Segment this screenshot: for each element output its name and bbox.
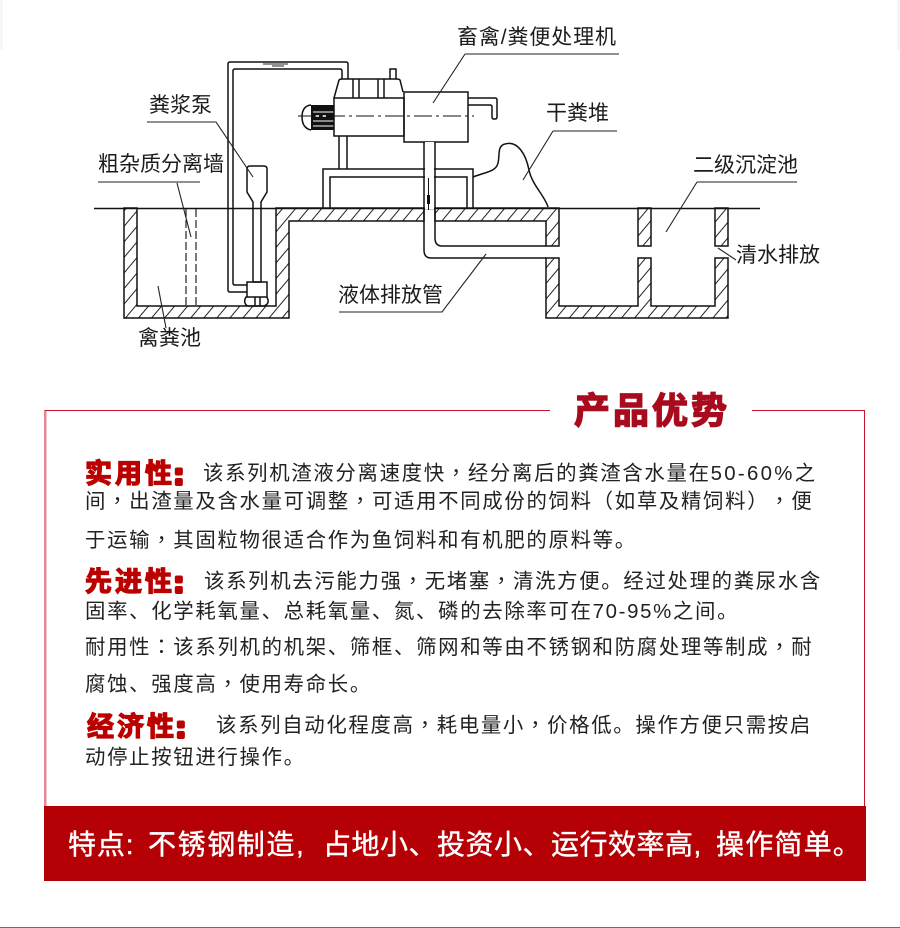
panel: product advantages: [45, 390, 864, 806]
valve: [428, 178, 430, 210]
label: separation wall: 粗杂质分离墙: [98, 153, 224, 176]
label: clean water discharge: 清水排放: [736, 244, 820, 267]
flow arrow on pipe: [263, 64, 288, 66]
top vent: [390, 69, 396, 79]
label: manure pit: [138, 286, 201, 350]
block: practicality: :: [174, 459, 187, 491]
label: slurry pump: 粪浆泵: [149, 94, 212, 117]
label: liquid discharge pipe: 液体排放管: [338, 284, 443, 307]
secondary sedimentation tank: [546, 208, 728, 318]
block: practicality: [85, 456, 817, 553]
block: economy: [85, 708, 812, 769]
block: practicality: 间，出渣量及含水量可调整，可适用不同成份的饲料（如草及精饲料），便: [85, 484, 813, 514]
banner: features: 不锈钢制造,: [148, 829, 305, 860]
block: practicality: 实用性: [85, 459, 175, 489]
label: machine: [433, 26, 619, 103]
block: advanced: [85, 564, 822, 623]
block: advanced: 先进性: [85, 567, 175, 597]
banner: features: [44, 806, 866, 881]
screw body: [334, 98, 404, 136]
housing: [334, 79, 403, 98]
ground line: [94, 208, 760, 210]
block: durability: 腐蚀、强度高，使用寿命长。: [85, 667, 372, 697]
label: dry manure pile: [523, 102, 617, 180]
drain pipe: [424, 142, 546, 258]
block: advanced: 该系列机去污能力强，无堵塞，清洗方便。经过处理的粪尿水含: [204, 564, 822, 594]
block: advanced: 固率、化学耗氧量、总耗氧量、氮、磷的去除率可在70-95%之间。: [85, 600, 739, 623]
block: economy: 经济性: [87, 712, 177, 742]
block: durability: [85, 630, 813, 697]
motor: [302, 105, 334, 130]
label: machine: 畜禽/粪便处理机: [457, 26, 616, 49]
label: liquid discharge pipe: [338, 254, 486, 312]
label: secondary tank: [666, 154, 798, 232]
process diagram: [94, 26, 820, 350]
discharge box: [404, 92, 468, 142]
dry manure pile: [473, 143, 548, 207]
block: economy: :: [176, 712, 189, 744]
label: secondary tank: 二级沉淀池: [693, 154, 798, 177]
label: dry manure pile: 干粪堆: [546, 102, 609, 125]
manure treatment machine: [298, 69, 546, 258]
banner: features: 操作简单。: [716, 829, 862, 860]
block: practicality: 该系列机渣液分离速度快，经分离后的粪渣含水量在50-60%之: [203, 456, 817, 486]
feed pipe: [228, 62, 348, 292]
banner: features: 占地小、投资小、运行效率高,: [323, 829, 702, 860]
banner: features: 特点:: [68, 829, 134, 860]
label: manure pit: 禽粪池: [138, 327, 201, 350]
block: advanced: :: [174, 567, 187, 599]
separation wall dashes: [186, 209, 196, 306]
centre line: [298, 115, 474, 117]
block: economy: 该系列自动化程度高，耗电量小，价格低。操作方便只需按启: [216, 708, 812, 738]
heading: 产品优势: 产品优势: [574, 390, 730, 431]
slurry pump: [245, 166, 268, 306]
poultry manure pit and floor slab: [124, 208, 559, 318]
outlet spout: [468, 98, 497, 119]
panel border: [45, 410, 864, 806]
block: economy: 动停止按钮进行操作。: [85, 746, 306, 769]
label: slurry pump: [147, 94, 253, 177]
leg: [339, 136, 347, 169]
block: durability: 耐用性：该系列机的机架、筛框、筛网和等由不锈钢和防腐处理等制成，耐: [85, 630, 813, 660]
label: separation wall: [98, 153, 224, 237]
stand frame: [323, 169, 473, 208]
block: practicality: 于运输，其固粒物很适合作为鱼饲料和有机肥的原料等。: [85, 523, 637, 553]
